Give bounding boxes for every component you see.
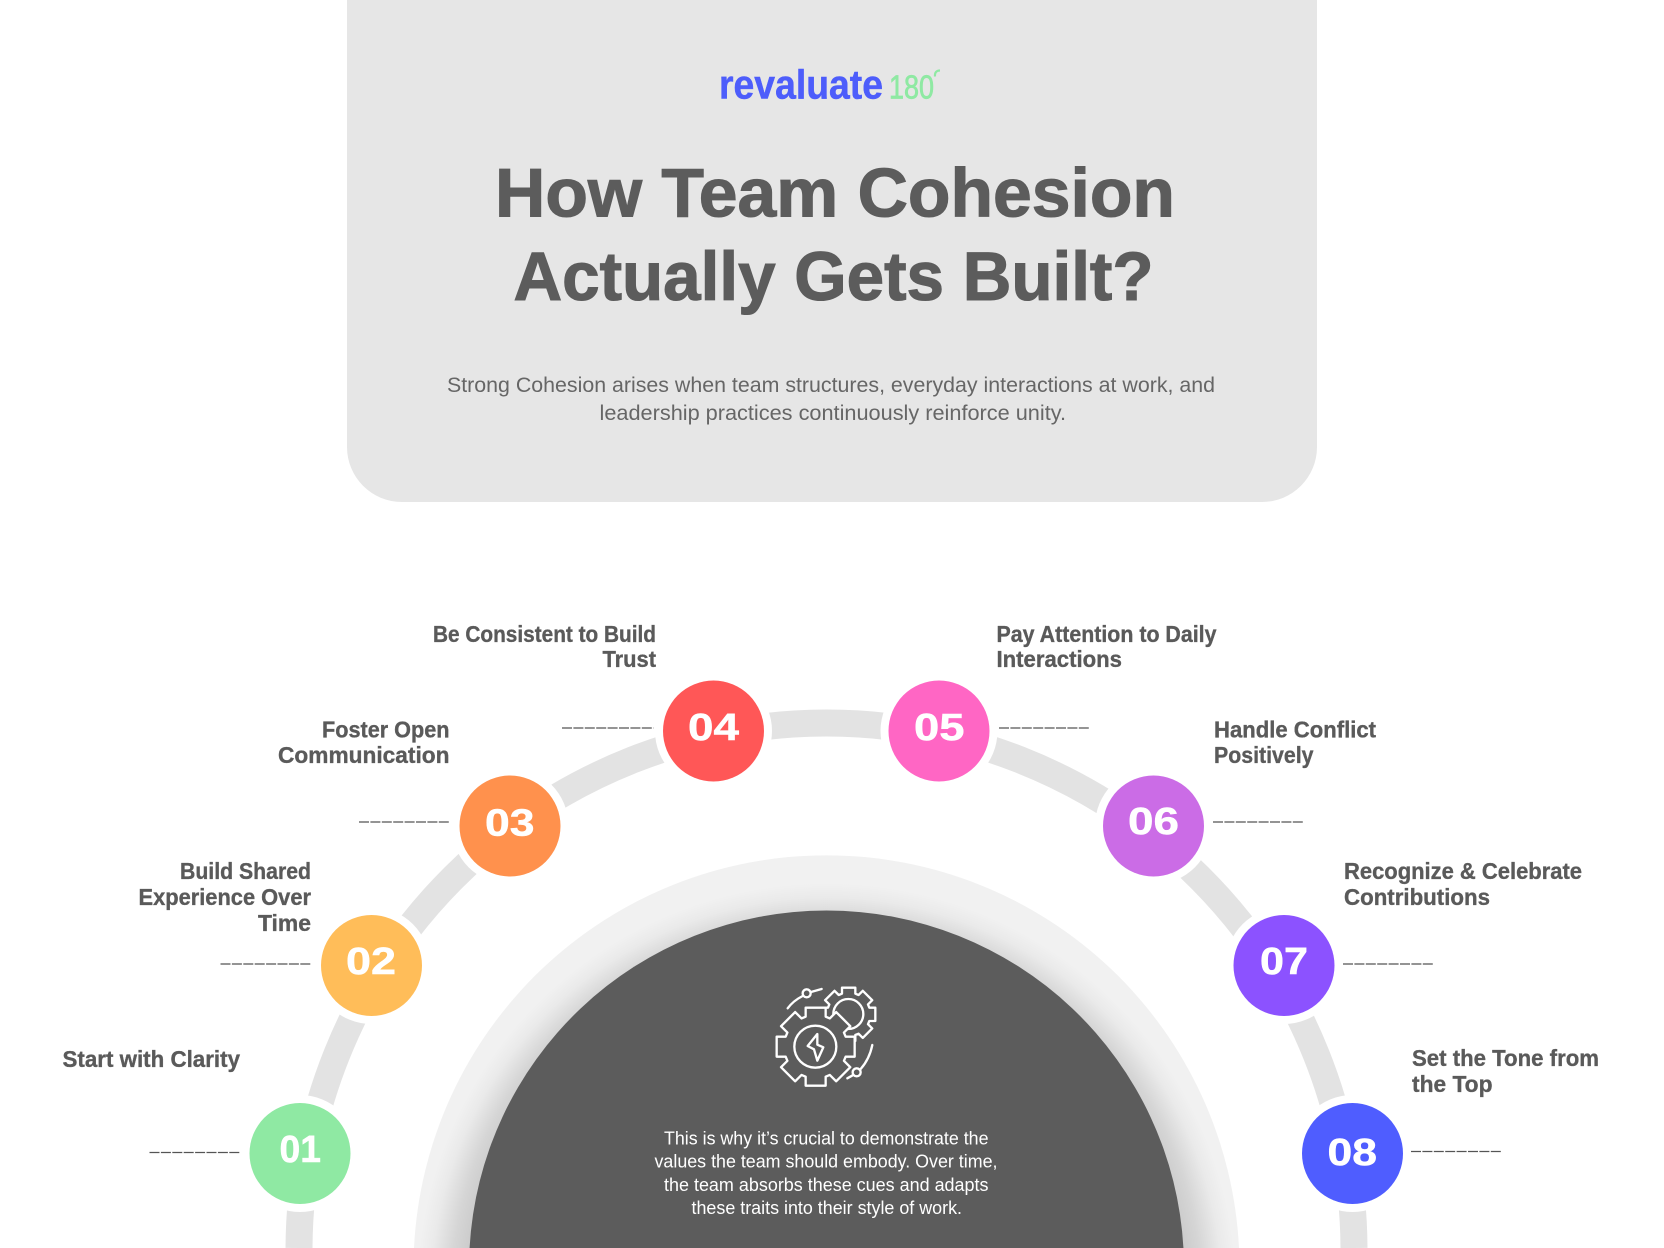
logo: revaluate 180: 180 [889,68,934,106]
node 02 [313,907,430,1024]
step 07 [1226,858,1582,1024]
label 02: Experience Over [138,884,311,910]
step 01 [62,1046,358,1212]
label 02: Build Shared [180,858,311,884]
label 04 [433,621,656,672]
title: How Team Cohesion [495,154,1175,232]
center text: these traits into their style of work. [692,1198,962,1218]
step 03 [278,716,568,884]
label 07: Recognize & Celebrate [1344,858,1582,884]
step 08 [1294,1045,1599,1212]
label 04: Be Consistent to Build [433,621,656,647]
node 07 [1226,907,1342,1024]
connector 06 [1213,821,1304,823]
node 03 [452,768,568,884]
subtitle: leadership practices continuously reinforce unity. [600,401,1066,425]
label 03: Foster Open [322,716,450,742]
step 02 [138,858,430,1024]
connector 07 [1343,963,1434,965]
label 08: the Top [1412,1071,1492,1097]
label 06: Positively [1214,742,1314,768]
label 04: Trust [602,646,656,672]
node 01: 01 [280,1129,321,1171]
center text: the team absorbs these cues and adapts [664,1175,988,1195]
label 02 [138,858,311,936]
node 03: 03 [485,802,534,844]
connector 02 [220,963,311,965]
logo: revaluate 180: revaluate [719,62,883,108]
label 06 [1214,716,1376,768]
icon: gears with lightning bolt [777,988,875,1086]
label 06: Handle Conflict [1214,716,1376,742]
label 08 [1412,1045,1599,1097]
soft shadow [414,855,1239,1248]
node 04: 04 [688,707,739,749]
title [495,154,1175,315]
node 02: 02 [346,941,396,983]
node 06: 06 [1128,801,1179,843]
node 08: 08 [1328,1132,1377,1174]
node 05 [880,672,998,790]
label 08: Set the Tone from [1412,1045,1599,1071]
label 05 [996,621,1217,672]
label 02: Time [258,910,311,936]
title: Actually Gets Built? [514,238,1154,315]
label 05: Pay Attention to Daily [996,621,1217,647]
label 07: Contributions [1344,884,1490,910]
label 03 [278,716,450,768]
center text: This is why it’s crucial to demonstrate the [664,1128,988,1148]
center text [654,1128,998,1218]
label 07 [1344,858,1582,910]
node 05: 05 [914,707,964,749]
arc track [299,723,1354,1248]
connector 08 [1411,1150,1502,1152]
central semicircle [414,855,1239,1248]
subtitle: Strong Cohesion arises when team structures, everyday interactions at work, and [447,373,1215,397]
connector 04 [562,727,654,729]
outer light ring [414,855,1239,1248]
label 03: Communication [278,742,450,768]
node 06 [1095,768,1212,884]
label 05: Interactions [996,646,1122,672]
panel: header [347,0,1317,502]
label 01: Start with Clarity [62,1046,240,1072]
node 08 [1294,1095,1411,1212]
node 07: 07 [1260,941,1308,983]
dark semicircle [470,911,1183,1248]
node 04 [655,672,772,790]
node 01 [242,1095,358,1212]
connector 01 [150,1152,240,1154]
step 06 [1095,716,1376,884]
connector 03 [359,821,450,823]
center text: values the team should embody. Over time, [654,1152,998,1172]
step 05 [880,621,1217,790]
connector 05 [999,727,1090,729]
step 04 [433,621,772,790]
subtitle [447,373,1215,425]
